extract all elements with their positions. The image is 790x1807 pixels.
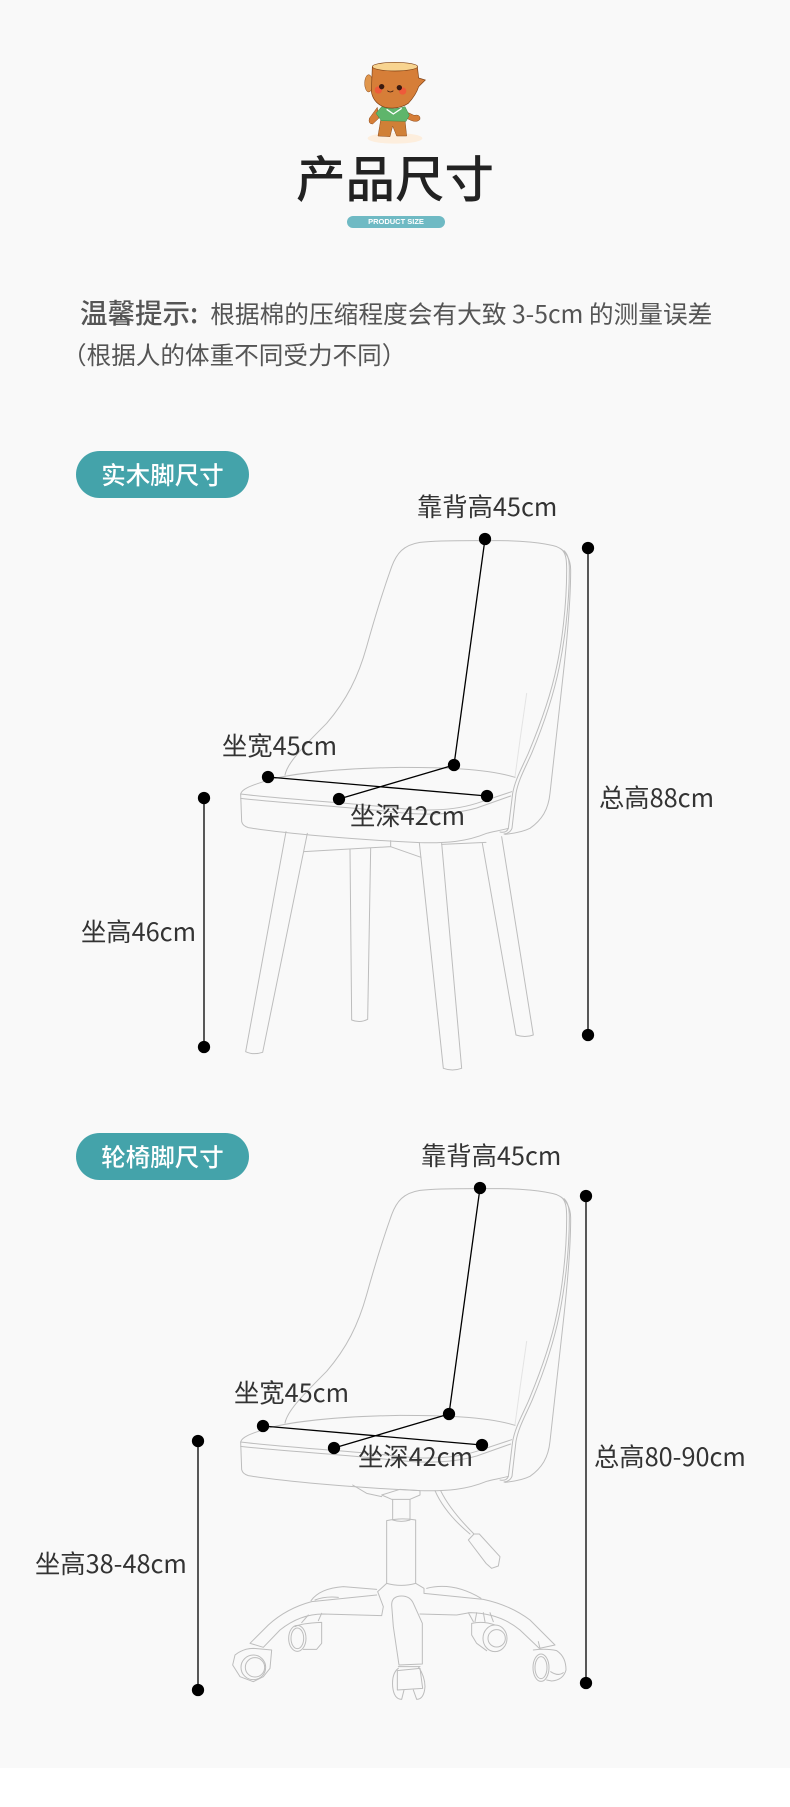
label: seat width: 坐宽45cm <box>222 727 337 763</box>
title: 产品尺寸 <box>296 141 494 212</box>
tip line one: 温馨提示: 根据棉的压缩程度会有大致 3-5cm 的测量误差 <box>80 291 712 331</box>
section heading: wooden legs: 实木脚尺寸 <box>101 457 224 492</box>
subtitle pill: product size: PRODUCT SIZE <box>368 217 424 226</box>
label: seat height: 坐高46cm <box>81 913 196 949</box>
swivel base with casters <box>233 1485 566 1699</box>
section heading: wooden legs <box>76 451 249 498</box>
label: back height: 靠背高45cm <box>417 488 557 524</box>
label: seat depth: 坐深42cm <box>350 797 465 833</box>
dimension lines and dots <box>198 534 594 1052</box>
dimension lines and dots <box>192 1182 592 1696</box>
label: total height: 总高88cm <box>599 779 714 815</box>
label: total height: 总高80-90cm <box>594 1438 746 1474</box>
subtitle pill: product size <box>347 216 445 228</box>
section heading: swivel legs <box>76 1133 249 1180</box>
icon: tree stump mascot <box>364 62 426 144</box>
label: seat width: 坐宽45cm <box>234 1374 349 1410</box>
tip line two: （根据人的体重不同受力不同） <box>62 336 406 372</box>
chair back and seat <box>241 541 571 843</box>
tip text <box>62 291 712 372</box>
label: seat depth: 坐深42cm <box>358 1438 473 1474</box>
chair back and seat <box>241 1189 571 1491</box>
section heading: swivel legs: 轮椅脚尺寸 <box>101 1139 224 1174</box>
wooden legs <box>246 832 533 1070</box>
chair diagram: wooden legs <box>198 532 594 1070</box>
label: seat height: 坐高38-48cm <box>35 1545 187 1581</box>
label: back height: 靠背高45cm <box>421 1137 561 1173</box>
